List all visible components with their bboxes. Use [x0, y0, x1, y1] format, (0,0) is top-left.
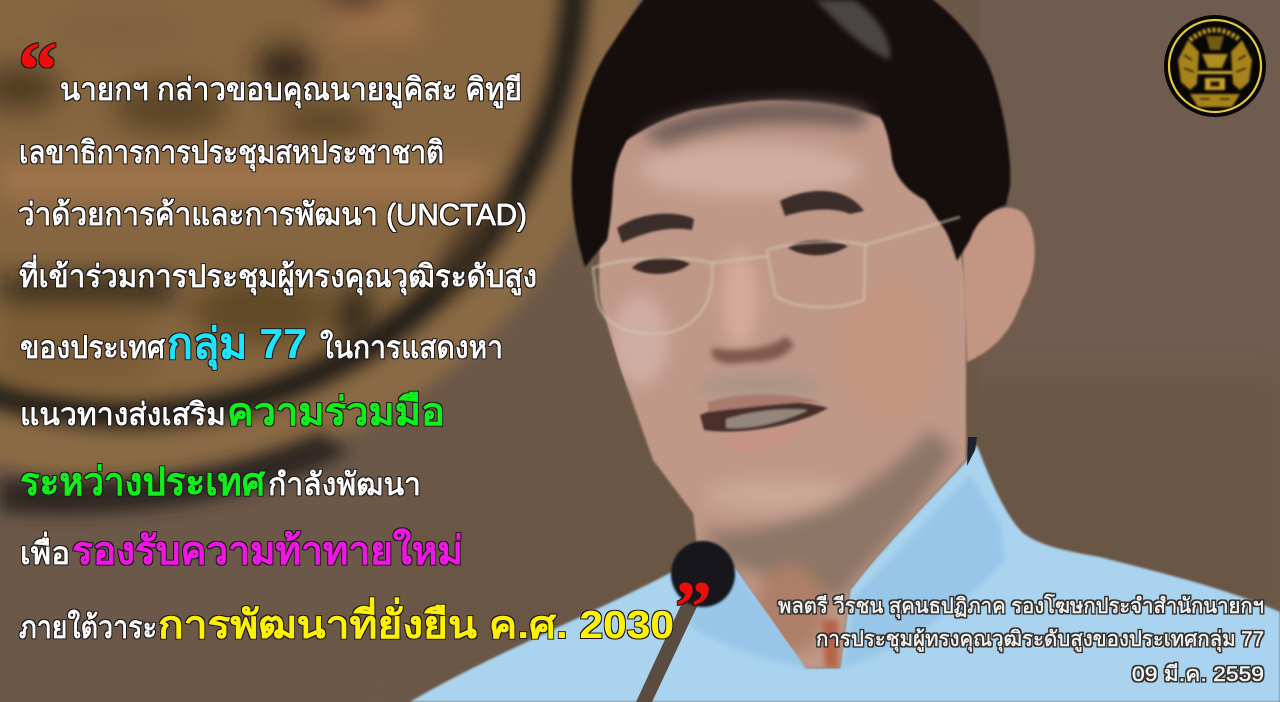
eyes — [632, 240, 848, 274]
line 9: ภายใต้วาระ — [19, 610, 157, 645]
line 7: ระหว่างประเทศ — [20, 461, 266, 504]
shirt collar — [690, 475, 1005, 668]
line 1: นายกฯ กล่าวขอบคุณนายมูคิสะ คิทูยี — [60, 72, 522, 109]
line 8: เพื่อ — [20, 532, 70, 571]
hair — [572, 0, 1010, 267]
line 8: รองรับความท้าทายใหม่ — [72, 528, 463, 573]
line 9 — [19, 597, 674, 647]
caption — [778, 594, 1264, 686]
line 2: เลขาธิการการประชุมสหประชาชาติ — [19, 135, 444, 172]
collar shadow — [967, 437, 977, 466]
line 6 — [20, 391, 445, 434]
line 5: ในการแสดงหา — [320, 330, 503, 365]
event: การประชุมผู้ทรงคุณวุฒิระดับสูงของประเทศกลุ่ม 77 — [816, 628, 1264, 652]
person — [410, 0, 1280, 702]
shirt — [410, 445, 1280, 702]
line 4: ที่เข้าร่วมการประชุมผู้ทรงคุณวุฒิระดับสูง — [19, 255, 537, 296]
lower shadow band — [0, 432, 350, 514]
line 5: ของประเทศ — [20, 330, 165, 365]
nose — [712, 336, 794, 364]
speaker name: พลตรี วีรชน สุคนธปฏิภาค รองโฆษกประจำสำนักนายกฯ — [778, 594, 1264, 619]
eyebrows — [617, 191, 864, 243]
line 7 — [20, 461, 421, 504]
logo: government seal — [1164, 15, 1266, 117]
line 7: กำลังพัฒนา — [268, 467, 421, 502]
closing quote mark: ” — [675, 567, 712, 649]
line 6: แนวทางส่งเสริม — [20, 397, 226, 432]
seal emblem — [1178, 30, 1252, 107]
line 5: กลุ่ม 77 — [167, 320, 307, 370]
face shading — [612, 144, 955, 668]
line 9: การพัฒนาที่ยั่งยืน ค.ศ. 2030 — [158, 597, 674, 647]
neck and face — [599, 100, 966, 668]
ear — [962, 208, 1035, 362]
opening quote mark: “ — [18, 27, 58, 115]
microphone — [636, 541, 735, 702]
hair highlight — [815, 0, 890, 60]
glasses — [593, 217, 960, 334]
line 5 — [20, 320, 503, 370]
date: 09 มี.ค. 2559 — [1132, 663, 1264, 686]
mouth — [700, 394, 828, 451]
line 3: ว่าด้วยการค้าและการพัฒนา (UNCTAD) — [18, 197, 527, 232]
quote text — [18, 27, 712, 649]
blurred seal backdrop — [0, 0, 642, 514]
line 6: ความร่วมมือ — [227, 391, 445, 434]
